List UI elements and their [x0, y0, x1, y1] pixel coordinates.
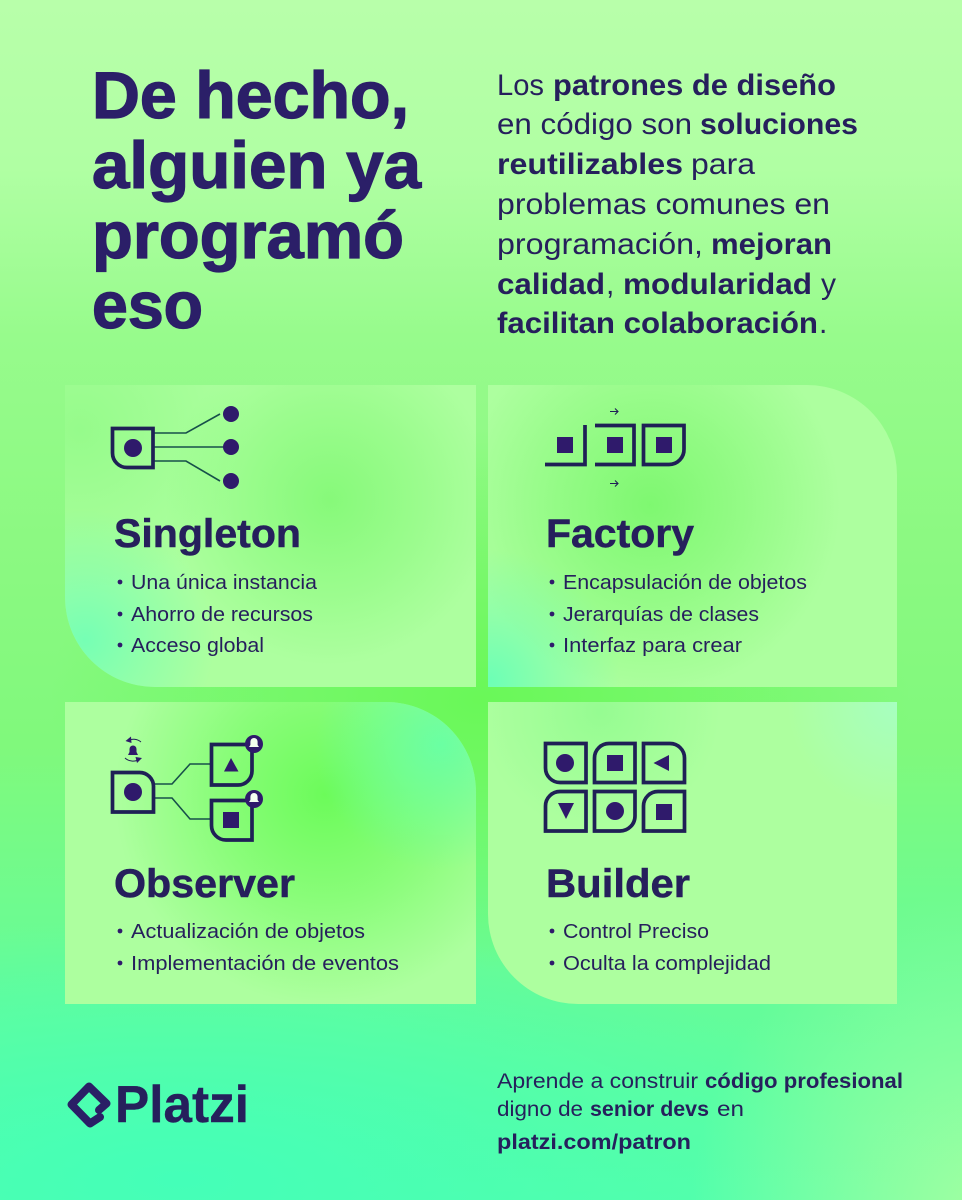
list: Singleton [118, 572, 318, 657]
heading: Factory: Factory [546, 512, 695, 556]
list: Singleton: Una única instancia [131, 572, 318, 594]
intro text block: , [606, 268, 614, 301]
intro text block: facilitan colaboración [497, 307, 818, 340]
panel: Observer [65, 702, 476, 1004]
intro text block [497, 69, 858, 340]
intro text block: programación, [497, 228, 703, 261]
intro text block: para [691, 148, 755, 181]
list: Factory: Jerarquías de clases [563, 604, 759, 626]
intro text block: patrones de diseño [553, 69, 836, 102]
title: eso [92, 268, 203, 342]
call to action: senior devs [590, 1097, 709, 1121]
call to action: digno de [497, 1097, 583, 1121]
list: Factory: Interfaz para crear [563, 635, 742, 657]
list: Singleton: Acceso global [131, 635, 264, 657]
title: programó [92, 198, 404, 272]
heading: Observer: Observer [114, 862, 295, 906]
intro text block: modularidad [623, 268, 812, 301]
icon: factory [545, 408, 684, 486]
heading: Singleton: Singleton [114, 512, 301, 556]
title [92, 58, 422, 342]
list: Observer [118, 921, 399, 975]
heading: Builder: Builder [546, 862, 690, 906]
list: Builder [550, 921, 771, 975]
list: Observer: Actualización de objetos [131, 921, 365, 943]
panel: Builder [488, 702, 897, 1004]
intro text block: y [821, 268, 836, 301]
list: Builder: Oculta la complejidad [563, 953, 771, 975]
intro text block: calidad [497, 268, 605, 301]
list: Factory: Encapsulación de objetos [563, 572, 807, 594]
intro text block: en código son [497, 108, 692, 141]
panel: Factory [488, 385, 897, 687]
call to action: código profesional [705, 1069, 903, 1093]
call to action: platzi.com/patron [497, 1130, 691, 1154]
list: Observer: Implementación de eventos [131, 953, 399, 975]
list: Factory [550, 572, 807, 657]
panel: Singleton [65, 385, 476, 687]
call to action [497, 1069, 903, 1154]
call to action: en [717, 1097, 744, 1121]
call to action: Aprende a construir [497, 1069, 698, 1093]
intro text block: problemas comunes en [497, 188, 830, 221]
intro text block: Los [497, 69, 544, 102]
intro text block: mejoran [711, 228, 832, 261]
icon: singleton [112, 406, 239, 489]
intro text block: soluciones [700, 108, 858, 141]
icon: observer [112, 735, 263, 840]
title: alguien ya [92, 128, 422, 202]
title: De hecho, [92, 58, 409, 132]
logo: Platzi: Platzi [115, 1076, 249, 1134]
intro text block: . [819, 307, 827, 340]
icon: builder [546, 744, 684, 831]
list: Builder: Control Preciso [563, 921, 709, 943]
intro text block: reutilizables [497, 148, 683, 181]
list: Singleton: Ahorro de recursos [131, 604, 313, 626]
